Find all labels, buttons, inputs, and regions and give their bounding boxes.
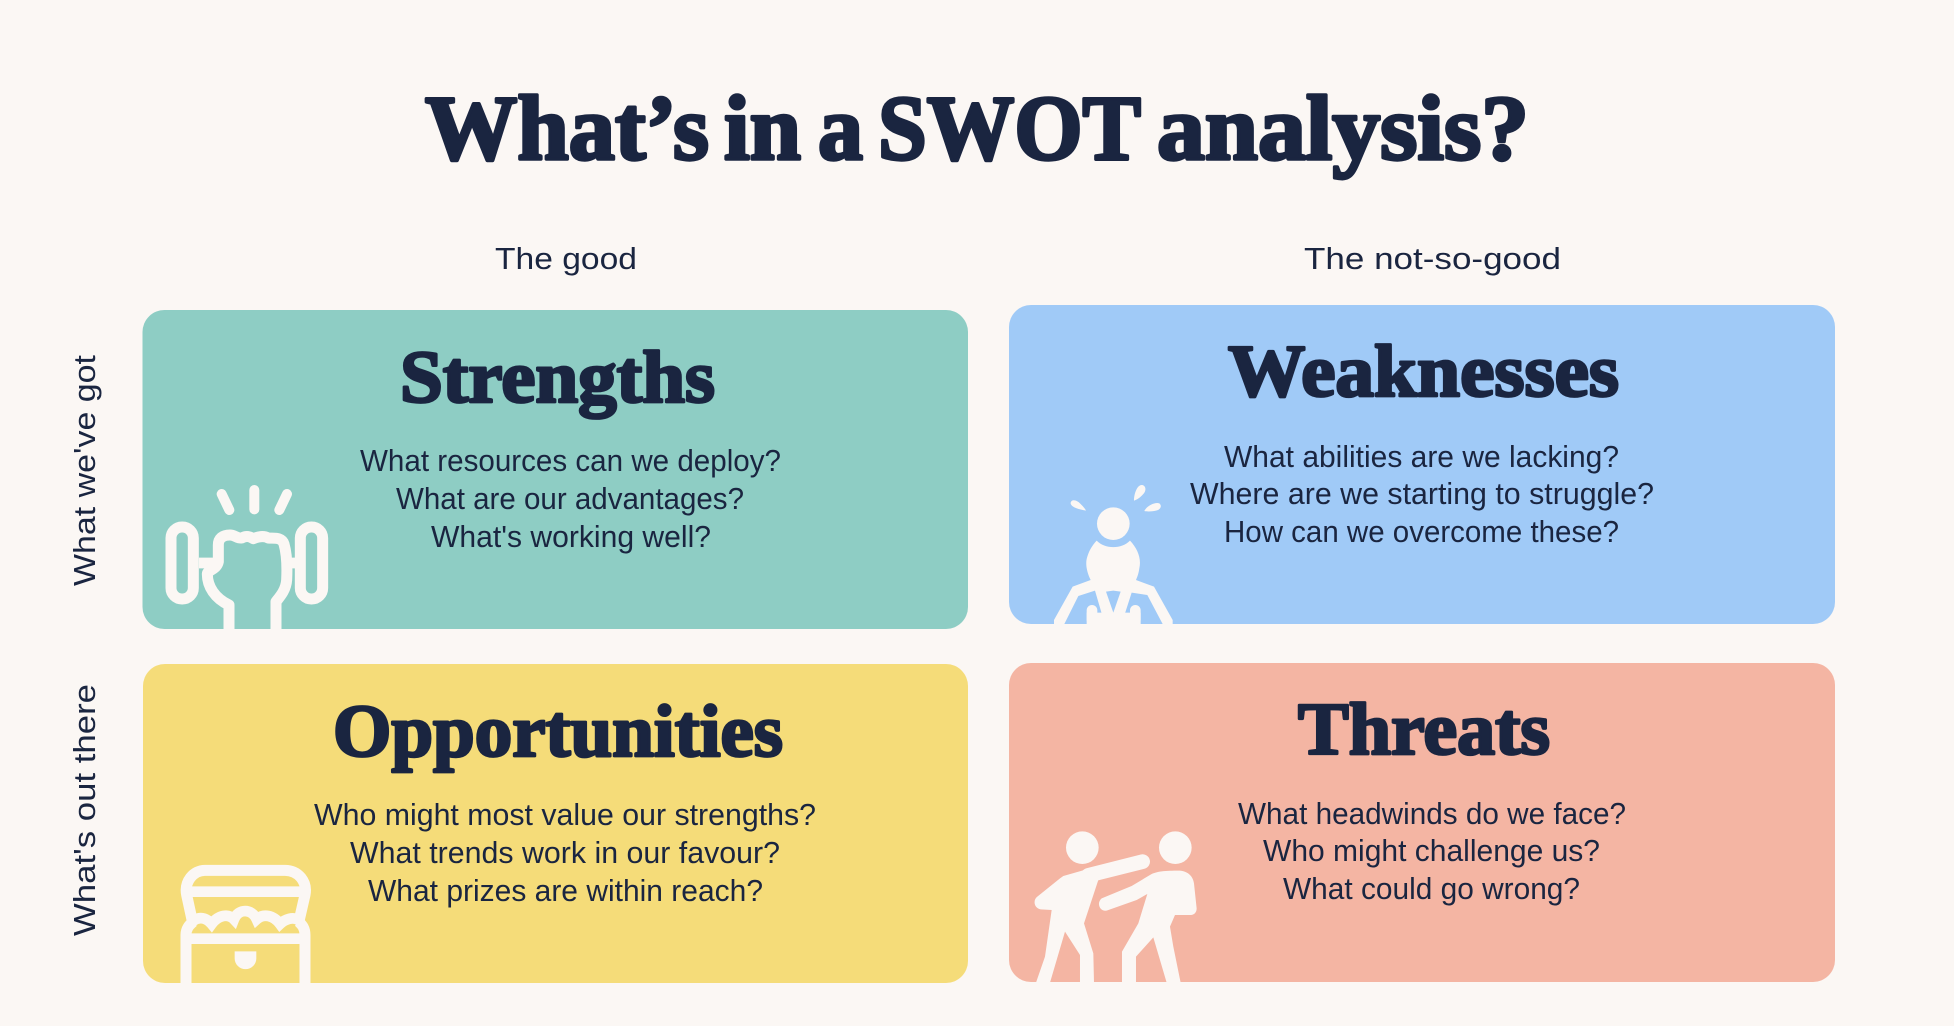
- icon: two people pushing: [1035, 831, 1197, 983]
- panel: strengths: [142, 310, 968, 629]
- text: strengths questions: What are our advantages?: [396, 481, 744, 516]
- row label: what we've got: What we've got: [67, 355, 102, 586]
- text: threats questions: [1238, 796, 1626, 906]
- title: [425, 77, 1529, 179]
- heading: strengths: Strengths: [400, 337, 715, 419]
- title: a: [818, 77, 863, 179]
- title: What’s: [425, 77, 709, 179]
- text: strengths questions: What's working well?: [431, 519, 711, 554]
- panel: threats: [1009, 663, 1835, 983]
- column heading: the not-so-good: The not-so-good: [1304, 241, 1561, 276]
- text: weaknesses questions: How can we overcome these?: [1224, 514, 1619, 549]
- text: strengths questions: What resources can we deploy?: [360, 443, 781, 478]
- title: SWOT: [878, 77, 1141, 179]
- heading: opportunities: Opportunities: [333, 691, 783, 773]
- icon: fist with dumbbell: [171, 490, 323, 629]
- text: opportunities questions: What trends work in our favour?: [350, 835, 780, 870]
- text: weaknesses questions: What abilities are we lacking?: [1224, 439, 1619, 474]
- text: weaknesses questions: Where are we starting to struggle?: [1190, 476, 1654, 511]
- column heading: the good: The good: [495, 241, 637, 276]
- heading: weaknesses: Weaknesses: [1228, 331, 1619, 413]
- text: weaknesses questions: [1190, 439, 1654, 549]
- icon: stressed person at desk: [1054, 485, 1173, 625]
- text: strengths questions: [360, 443, 781, 554]
- heading: threats: Threats: [1298, 689, 1550, 771]
- panel: weaknesses: [1009, 305, 1835, 625]
- row label: what's out there: What's out there: [67, 684, 102, 936]
- text: opportunities questions: What prizes are within reach?: [368, 873, 763, 908]
- panel: opportunities: [143, 664, 968, 983]
- text: opportunities questions: Who might most value our strengths?: [314, 797, 816, 832]
- text: threats questions: What could go wrong?: [1283, 871, 1580, 906]
- text: opportunities questions: [314, 797, 816, 908]
- title: in: [724, 77, 801, 179]
- text: threats questions: Who might challenge us?: [1263, 833, 1600, 868]
- icon: treasure chest: [186, 870, 305, 983]
- title: analysis?: [1157, 77, 1529, 179]
- text: threats questions: What headwinds do we face?: [1238, 796, 1626, 831]
